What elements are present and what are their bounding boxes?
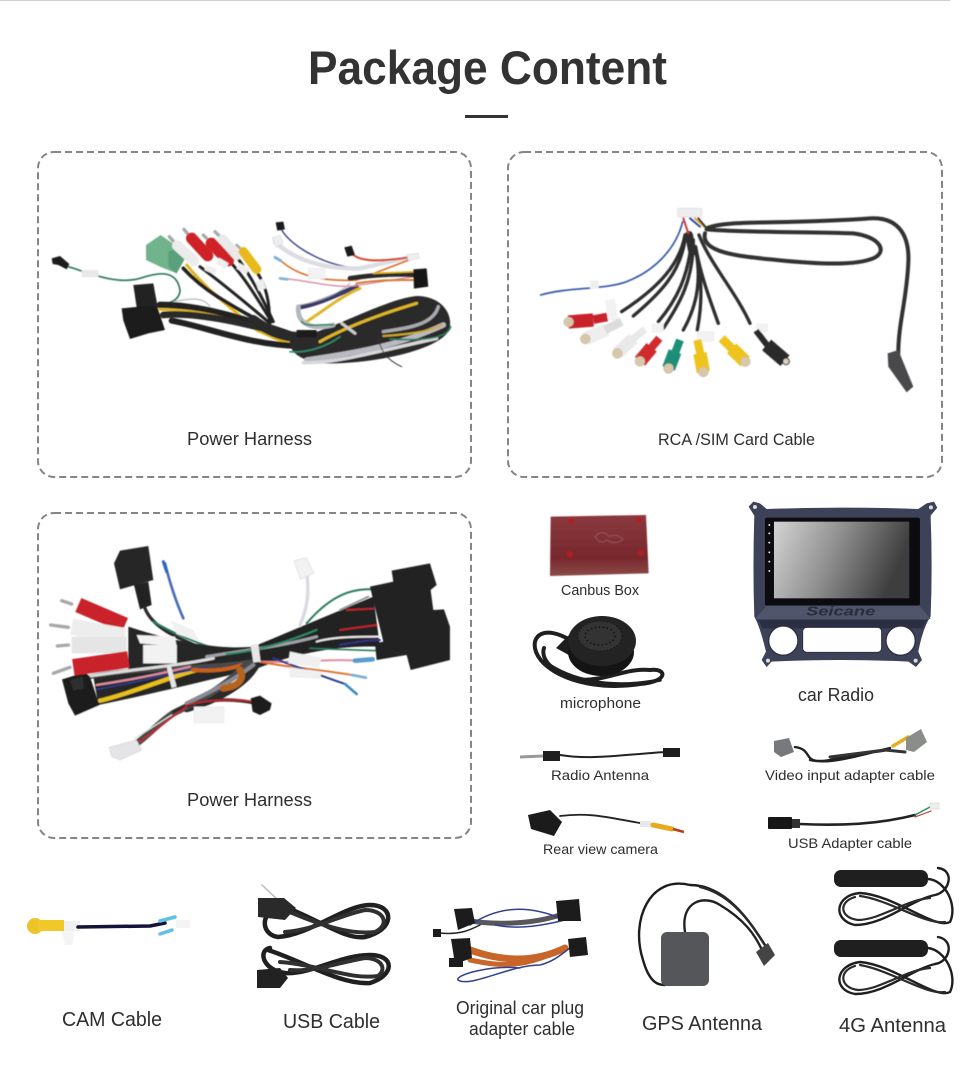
item: car radio (749, 502, 937, 705)
item: microphone (535, 616, 662, 712)
label: CAM Cable (62, 1009, 162, 1031)
title underline (465, 115, 508, 118)
label: Canbus Box (561, 583, 640, 599)
illustration: power harness with RCA plugs (52, 222, 451, 367)
item: USB adapter cable (768, 803, 939, 851)
label: USB Cable (283, 1011, 380, 1033)
label: GPS Antenna (642, 1013, 763, 1035)
label: Power Harness (187, 429, 312, 449)
label: Original car plug (456, 998, 584, 1018)
panel: power harness bottom (38, 513, 471, 838)
panel: RCA / SIM card cable (508, 152, 942, 477)
item: radio antenna (520, 748, 680, 783)
label: car Radio (798, 685, 874, 705)
label: microphone (560, 696, 641, 712)
label: USB Adapter cable (788, 835, 912, 851)
item: video input adapter cable (765, 729, 935, 783)
item: canbus box (550, 515, 649, 599)
item: rear view camera (528, 810, 684, 857)
group: accessories (520, 502, 939, 857)
title: Package Content (308, 41, 667, 94)
item: car radio: Seicane (806, 605, 875, 619)
label: RCA /SIM Card Cable (658, 431, 815, 449)
label: Radio Antenna (551, 767, 649, 783)
illustration: power harness with car connectors (51, 546, 450, 760)
item: original car plug adapter cable: adapter cable (469, 1019, 575, 1039)
panel: power harness top (38, 152, 471, 477)
item: 4G antenna (834, 868, 952, 1037)
label: 4G Antenna (839, 1015, 947, 1037)
label: Rear view camera (543, 841, 658, 857)
item: original car plug adapter cable (433, 899, 588, 1039)
label: Video input adapter cable (765, 767, 935, 783)
item: GPS antenna (639, 884, 775, 1035)
label: Power Harness (187, 790, 312, 810)
illustration: RCA and SIM cable (541, 208, 913, 392)
item: CAM cable (27, 917, 190, 1031)
row: bottom accessories (27, 868, 952, 1039)
item: USB cable (257, 885, 389, 1033)
